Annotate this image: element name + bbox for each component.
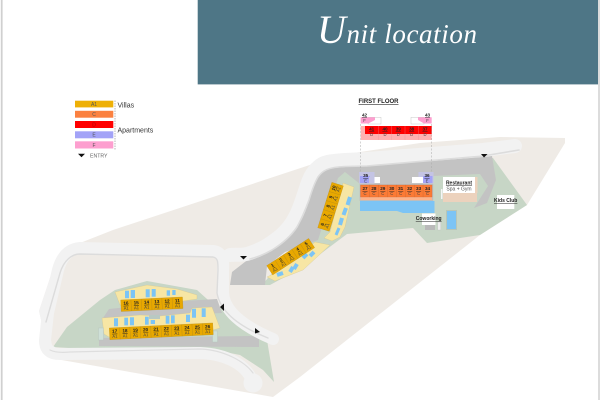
apartments: ground floor: 33	[416, 186, 422, 191]
units 16 to 11	[121, 297, 183, 311]
amenity: swimming pool	[446, 210, 456, 230]
amenity: coworking	[416, 214, 442, 230]
villa block: units 1 to 5: 5	[304, 241, 309, 246]
villa block: units 1 to 5: A1	[280, 260, 288, 268]
apartments: ground floor: 28	[371, 186, 377, 191]
legend	[75, 100, 154, 159]
villa block: units 1 to 5: 2	[278, 257, 284, 263]
first floor plan: 41	[369, 126, 375, 132]
units 17 to 26: A1	[174, 331, 180, 336]
first floor plan: D	[423, 132, 427, 137]
green landscaping: west	[53, 281, 274, 382]
legend: Apartments	[118, 127, 154, 134]
amenity: restaurant and spa	[441, 177, 478, 202]
units 17 to 26: 25	[195, 325, 200, 330]
villa block: units 6 to 10: A1	[333, 195, 339, 202]
units 17 to 26: 17	[112, 329, 118, 334]
units 16 to 11: A1	[175, 303, 181, 308]
villa block: units 6 to 10: 7	[323, 213, 328, 217]
villa block: units 1 to 5: A1	[289, 255, 296, 262]
amenity: kids club	[494, 195, 517, 209]
villa block: units 6 to 10: 8	[325, 204, 331, 208]
units 16 to 11: A1	[165, 304, 171, 309]
apartments: ground floor: C	[372, 191, 375, 196]
legend: A1	[91, 102, 97, 108]
first floor plan: D	[397, 132, 400, 137]
first floor plan: 37	[422, 126, 428, 132]
villa block: units 6 to 10: A1	[327, 213, 333, 220]
villa block: units 1 to 5	[267, 238, 330, 281]
amenity: restaurant and spa: Restaurant	[446, 180, 472, 186]
first floor plan: 43	[425, 112, 430, 117]
apartments: ground floor: C	[426, 191, 429, 196]
units 17 to 26: A1	[205, 329, 211, 334]
apartments: ground floor: C	[417, 191, 420, 196]
units 16 to 11: 16	[123, 301, 129, 306]
units 17 to 26: A1	[154, 332, 160, 337]
villa block: units 6 to 10: 10	[331, 184, 337, 191]
first floor plan: 42	[362, 112, 367, 117]
units 16 to 11: 15	[134, 300, 139, 305]
units 16 to 11: A1	[134, 305, 140, 310]
road network	[39, 146, 519, 392]
apartments: ground floor: C	[363, 191, 367, 196]
villa block: units 1 to 5: 4	[295, 246, 300, 252]
units 16 to 11: A1	[144, 305, 150, 310]
apartments: ground floor: C	[399, 191, 402, 196]
villa block: units 6 to 10: A1	[335, 186, 342, 193]
units 16 to 11: 13	[154, 299, 160, 304]
site land	[39, 137, 565, 397]
units 17 to 26: 24	[184, 325, 190, 330]
green landscaping: east	[262, 158, 527, 285]
units 17 to 26: 23	[174, 326, 180, 331]
first floor plan: 38	[409, 126, 415, 132]
villa block: units 6 to 10: A1	[330, 204, 336, 211]
first floor plan: F	[363, 118, 366, 123]
units 17 to 26: 20	[143, 327, 149, 332]
apartments: ground floor: C	[408, 191, 411, 196]
villa block: units 1 to 5: A1	[272, 266, 279, 273]
units 17 to 26: A1	[143, 332, 149, 337]
units 17 to 26: 26	[205, 324, 211, 329]
apartments: ground floor: 27	[362, 186, 368, 191]
units 17 to 26: A1	[133, 333, 139, 338]
legend: E	[92, 133, 96, 139]
legend: C	[92, 112, 96, 118]
apartments: ground floor: 36	[424, 173, 430, 178]
legend: D	[92, 122, 96, 128]
units 17 to 26: A1	[185, 330, 191, 335]
units 16 to 11: 14	[144, 300, 150, 305]
villa block: units 1 to 5: A1	[305, 244, 313, 251]
villa block: south row	[98, 307, 220, 342]
entry arrows	[220, 154, 488, 334]
legend: ENTRY	[90, 153, 108, 159]
first floor plan: 40	[382, 126, 388, 132]
units 17 to 26: A1	[195, 330, 201, 335]
apartments: ground floor: 31	[398, 186, 404, 191]
amenity: kids club: Kids Club	[494, 198, 517, 204]
units 17 to 26	[109, 323, 213, 340]
grey paving	[99, 156, 496, 347]
units 17 to 26: 18	[122, 328, 128, 333]
villa block: units 6 to 10: 6	[320, 222, 325, 226]
units 16 to 11: A1	[124, 306, 130, 311]
apartments: ground floor: 35	[363, 173, 369, 178]
legend: Villas	[118, 102, 135, 110]
first floor plan: D	[370, 132, 373, 137]
heading: first floor: FIRST FLOOR	[358, 99, 399, 105]
apartments: ground floor	[359, 172, 434, 213]
units 17 to 26: 22	[164, 326, 169, 331]
units 16 to 11: 12	[164, 299, 170, 304]
villa block: units 6 to 10: 9	[328, 195, 334, 199]
apartments: ground floor: E	[426, 178, 429, 183]
first floor plan	[358, 99, 432, 172]
first floor plan: D	[383, 132, 387, 137]
apartments: ground floor: C	[381, 191, 384, 196]
first floor plan: F	[426, 118, 429, 123]
legend: F	[92, 143, 96, 149]
units 16 to 11: 11	[175, 298, 180, 303]
apartment pool	[360, 201, 434, 213]
apartments: ground floor: 30	[389, 186, 395, 191]
apartments: ground floor: 29	[380, 186, 386, 191]
title banner	[198, 0, 598, 85]
apartments: ground floor: C	[390, 191, 393, 196]
units 17 to 26: 19	[133, 328, 138, 333]
amenity: restaurant and spa: Spa + Gym	[446, 186, 472, 192]
units 17 to 26: A1	[164, 331, 170, 336]
units 17 to 26: 21	[153, 327, 159, 332]
villa block: units 1 to 5: A1	[297, 249, 304, 257]
amenity: coworking: Coworking	[416, 216, 442, 222]
apartments: ground floor: 32	[407, 186, 413, 191]
first floor plan: D	[410, 132, 413, 137]
villa block: units 6 to 10	[318, 182, 354, 241]
apartments: ground floor: 34	[425, 186, 430, 191]
units 17 to 26: A1	[112, 334, 118, 339]
first floor plan: 39	[396, 126, 401, 132]
villa block: units 6 to 10: A1	[324, 222, 331, 229]
villa block: units 1 to 5: 3	[287, 252, 292, 257]
units 16 to 11: A1	[154, 304, 160, 309]
villa block: units 1 to 5: 1	[270, 262, 275, 268]
villa block: north row	[115, 285, 197, 311]
units 17 to 26: A1	[123, 333, 129, 338]
title: Unit location: Unit location	[317, 7, 477, 52]
apartments: ground floor: E	[364, 178, 367, 183]
